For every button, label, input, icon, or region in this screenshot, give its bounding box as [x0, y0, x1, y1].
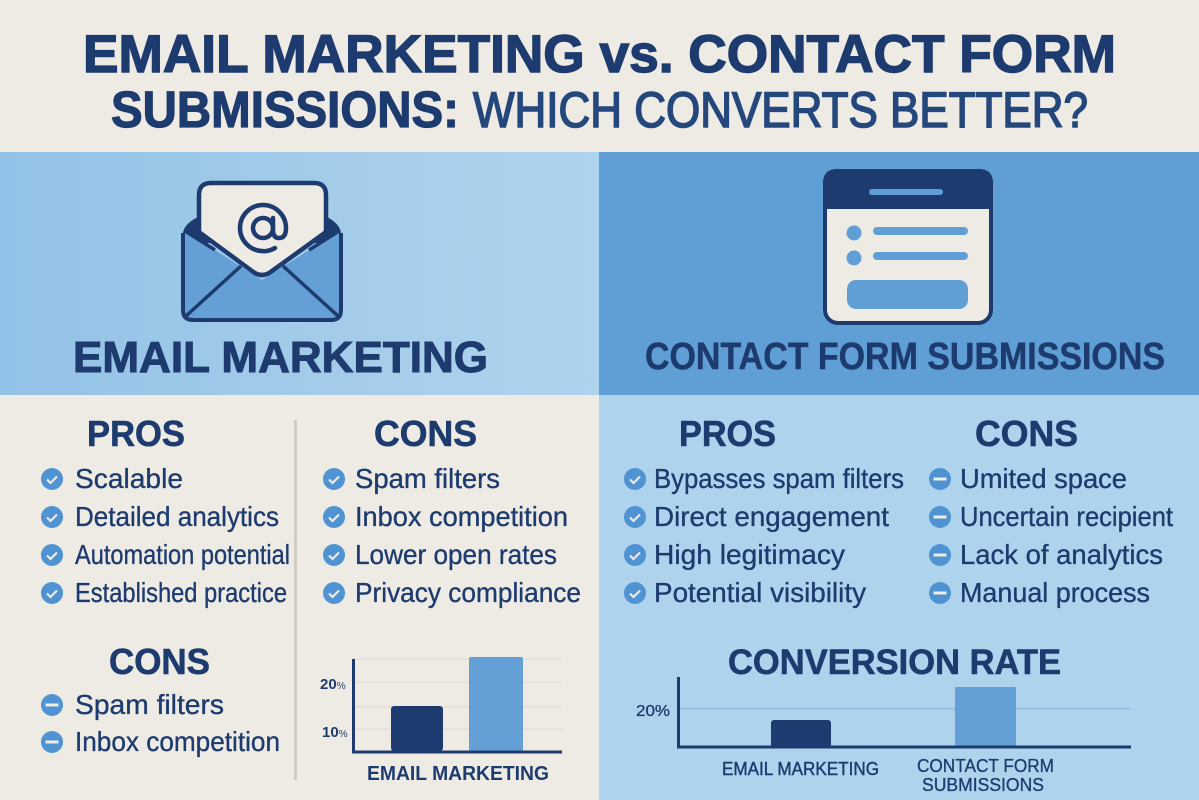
- category label: contact form submissions: [917, 756, 1054, 795]
- icon: envelope: [183, 183, 341, 320]
- category label: email marketing: EMAIL MARKETING: [722, 759, 879, 779]
- bar chart: conversion rate: [636, 643, 1131, 795]
- list: contact form pros items: Bypasses spam filters: [654, 463, 904, 494]
- list: contact form cons items: Umited space: [960, 463, 1127, 494]
- title: SUBMISSIONS:: [111, 81, 459, 138]
- list: email cons items: Privacy compliance: [355, 577, 581, 608]
- list: email cons items: Inbox competition: [355, 501, 568, 532]
- title: WHICH CONVERTS BETTER?: [473, 82, 1088, 138]
- list: contact form pros items: [624, 463, 904, 608]
- list: email pros items: [41, 463, 290, 608]
- list: contact form pros items: Direct engagement: [654, 501, 889, 532]
- panel: email cons lower: [41, 641, 280, 757]
- list: email cons lower items: [41, 689, 280, 757]
- axis label: 20%: 20%: [636, 703, 670, 720]
- heading: pros: PROS: [679, 413, 776, 454]
- list: email pros items: Scalable: [75, 463, 183, 494]
- bar chart: email marketing: [320, 657, 562, 785]
- list: email pros items: Automation potential: [75, 539, 290, 570]
- list: contact form cons items: Lack of analytics: [960, 539, 1163, 570]
- heading: cons: CONS: [109, 641, 210, 682]
- heading: pros: PROS: [87, 413, 185, 454]
- panel: email cons upper: [323, 413, 581, 608]
- category label: contact form submissions: SUBMISSIONS: [922, 775, 1044, 795]
- heading: conversion rate: CONVERSION RATE: [728, 643, 1061, 682]
- list: contact form pros items: Potential visibility: [654, 577, 866, 608]
- heading: email marketing: EMAIL MARKETING: [73, 333, 488, 382]
- icon: contact form window: [823, 169, 993, 323]
- panel: email pros: [41, 413, 290, 608]
- heading: cons: CONS: [975, 413, 1078, 454]
- panel: contact form pros: [624, 413, 904, 608]
- list: contact form cons items: Uncertain recipient: [960, 501, 1173, 532]
- list: email pros items: Established practice: [75, 577, 287, 608]
- panel: email marketing header: [0, 152, 599, 395]
- heading: cons: CONS: [374, 413, 477, 454]
- panel: contact form cons: [929, 413, 1173, 608]
- list: contact form pros items: High legitimacy: [654, 539, 845, 570]
- title: EMAIL MARKETING vs. CONTACT FORM: [83, 25, 1116, 84]
- panel: contact form header: [599, 152, 1199, 395]
- list: email cons items: [323, 463, 581, 608]
- list: email cons lower items: Inbox competition: [75, 726, 280, 757]
- list: email pros items: Detailed analytics: [75, 501, 279, 532]
- list: email cons items: Lower open rates: [355, 539, 557, 570]
- list: email cons items: Spam filters: [355, 463, 500, 494]
- title: [83, 25, 1116, 138]
- list: contact form cons items: [929, 463, 1173, 608]
- axis label: 20%: 20%: [320, 676, 346, 693]
- list: email cons lower items: Spam filters: [75, 689, 224, 720]
- chart label: EMAIL MARKETING: [367, 763, 549, 785]
- panel: contact form details: [599, 395, 1199, 800]
- list: contact form cons items: Manual process: [960, 577, 1150, 608]
- axis label: 10%: 10%: [322, 724, 348, 741]
- category label: contact form submissions: CONTACT FORM: [917, 756, 1054, 776]
